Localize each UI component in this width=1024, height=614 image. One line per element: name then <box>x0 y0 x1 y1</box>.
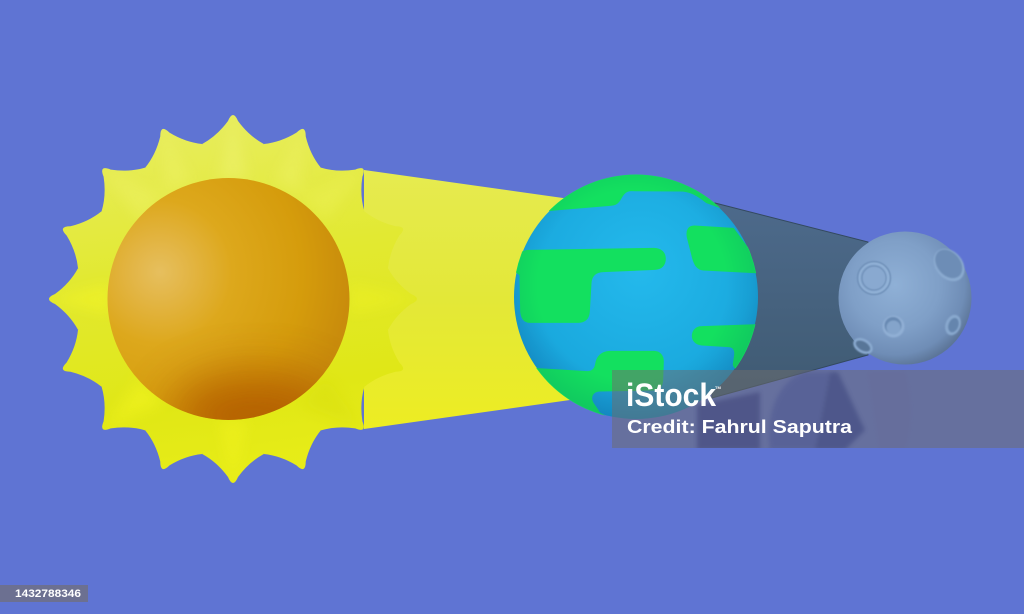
watermark ghost figures <box>696 371 865 448</box>
crater: lower centre <box>882 316 904 338</box>
trademark mark: TM <box>715 385 721 390</box>
continent: top <box>549 174 720 212</box>
image id label <box>0 585 88 602</box>
sun core dome <box>108 178 350 420</box>
sunlight beam <box>364 170 570 429</box>
infographic: solar eclipse scene <box>0 115 1024 602</box>
continent: left <box>510 248 665 322</box>
continent: right <box>686 226 756 274</box>
continent: bottom <box>536 350 664 416</box>
crater: bottom left <box>850 335 876 357</box>
sun core lower shading <box>154 346 326 420</box>
watermark panel <box>612 370 1024 450</box>
earth edge shading <box>514 175 758 419</box>
sun rim ridges <box>84 140 335 411</box>
id background <box>0 585 88 602</box>
icon: earth <box>514 174 758 419</box>
earth continents <box>516 174 756 416</box>
sun spiky rim <box>40 105 426 493</box>
watermark band <box>612 370 1024 448</box>
crater: ringed <box>858 262 890 294</box>
watermark logo: iStock <box>626 377 716 413</box>
crater: right <box>942 313 964 337</box>
icon: moon <box>838 232 972 364</box>
moon sphere <box>838 232 972 364</box>
icon: sun <box>40 105 426 493</box>
continent: lower right <box>692 324 756 368</box>
id number: 1432788346 <box>15 588 81 600</box>
shadow cone <box>712 203 868 398</box>
earth ocean <box>514 175 758 419</box>
watermark credit: Credit: Fahrul Saputra <box>627 417 853 437</box>
crater: top right <box>927 243 971 287</box>
